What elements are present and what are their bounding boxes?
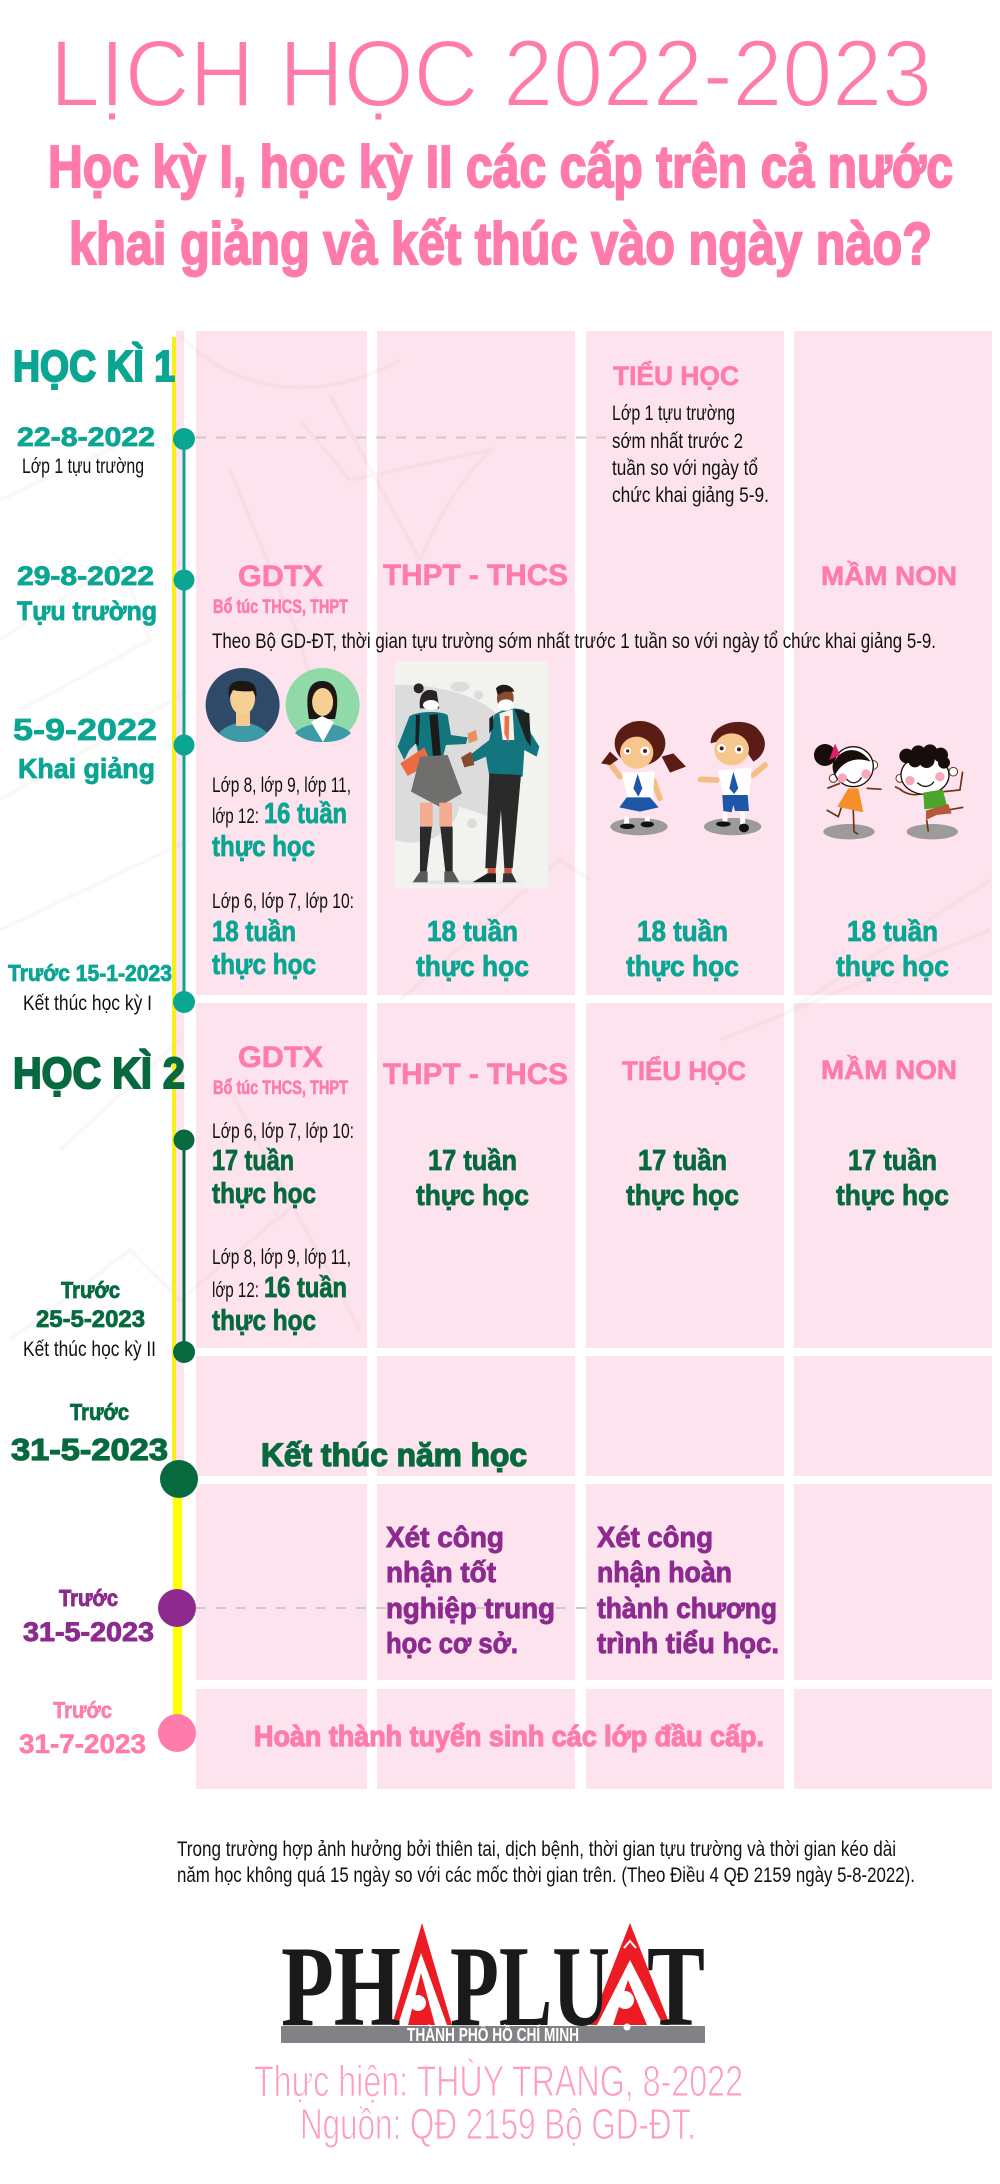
date: before 25-5-2023: [23, 1277, 156, 1361]
date: end of school year: [11, 1399, 168, 1467]
semester 1 study duration: GDTX: thực học: [212, 831, 315, 863]
note: Kết thúc học kỳ I: Kết thúc học kỳ I: [23, 992, 152, 1015]
semester 1 study duration: GDTX: Lớp 8, lớp 9, lớp 11,: [212, 774, 351, 797]
semester 1 study duration: other levels: 18 tuần: [427, 916, 518, 948]
milestone: lower secondary graduation: học cơ sở.: [386, 1628, 518, 1660]
primary school block, semester 1: tuần so với ngày tổ: [612, 457, 758, 480]
title: LỊCH HỌC 2022-2023: [50, 21, 932, 127]
date: enrolment deadline: [19, 1697, 146, 1759]
date: before 25-5-2023: Trước: [61, 1277, 120, 1303]
semester 2 column headings: [213, 1041, 957, 1099]
note: Lớp 1 tựu trường: Lớp 1 tựu trường: [22, 455, 144, 478]
logo: Pháp Luật TP.HCM: PH: [281, 1923, 401, 2050]
logo: Pháp Luật TP.HCM: THÀNH PHỐ HỒ CHÍ MINH: [407, 2024, 579, 2045]
subtitle: [48, 134, 953, 277]
date 5-9-2022: 5-9-2022: [13, 712, 157, 747]
semester 2 column headings: MẦM NON: [821, 1054, 957, 1085]
date 22-8-2022: 22-8-2022: [17, 422, 155, 452]
semester 2 study duration: other levels: thực học: [626, 1180, 739, 1212]
milestone: lower secondary graduation: Xét công: [386, 1522, 504, 1554]
date Trước 15-1-2023: Trước 15-1-2023: [8, 960, 172, 986]
semester 1 column headings: [213, 559, 957, 618]
semester 2 column headings: THPT - THCS: [383, 1058, 568, 1091]
semester 1 study duration: other levels: [416, 916, 949, 983]
semester 2 study duration: GDTX: Lớp 6, lớp 7, lớp 10:: [212, 1120, 354, 1143]
semester 2 column headings: Bổ túc THCS, THPT: [213, 1078, 348, 1099]
logo: Pháp Luật TP.HCM: T: [647, 1923, 705, 2050]
semester 2 study duration: other levels: thực học: [416, 1180, 529, 1212]
date: enrolment deadline: 31-7-2023: [19, 1729, 146, 1759]
semester 2 study duration: other levels: 17 tuần: [638, 1145, 727, 1177]
semester 2 study duration: other levels: 17 tuần: [848, 1145, 937, 1177]
semester 1 study duration: GDTX: Lớp 6, lớp 7, lớp 10:: [212, 890, 354, 913]
panel grid: [176, 331, 992, 1789]
semester 2 study duration: GDTX: 17 tuần: [212, 1145, 294, 1177]
heading: Học kì 1: HỌC KÌ 1: [13, 341, 175, 391]
primary school block, semester 1: chức khai giảng 5-9.: [612, 484, 769, 507]
semester 2 column headings: TIỂU HỌC: [622, 1055, 746, 1086]
illustration: primary pupils: [601, 721, 765, 835]
semester 1 study duration: other levels: thực học: [836, 951, 949, 983]
label Khai giảng: Khai giảng: [18, 753, 155, 784]
footnote: [177, 1838, 915, 1887]
label Tựu trường: Tựu trường: [17, 596, 157, 626]
date: enrolment deadline: Trước: [53, 1697, 112, 1723]
semester 2 column headings: GDTX: [238, 1041, 323, 1074]
date 29-8-2022: 29-8-2022: [17, 561, 154, 591]
semester 1 study duration: GDTX: [212, 774, 354, 981]
milestone: enrolment: Hoàn thành tuyển sinh các lớp đầu cấp.: [254, 1721, 764, 1753]
primary school block, semester 1: TIỂU HỌC: [613, 360, 739, 391]
credits: [254, 2057, 743, 2149]
semester 1 study duration: GDTX: 16 tuần: [264, 798, 347, 830]
semester 2 study duration: GDTX: Lớp 8, lớp 9, lớp 11,: [212, 1246, 351, 1269]
heading: Học kì 2: HỌC KÌ 2: [13, 1048, 185, 1098]
semester 1 study duration: other levels: 18 tuần: [847, 916, 938, 948]
milestone: primary completion: trình tiểu học.: [597, 1628, 779, 1660]
dashed connector: graduation date: [196, 1607, 590, 1609]
semester 2 study duration: other levels: thực học: [836, 1180, 949, 1212]
primary school block, semester 1: [612, 360, 769, 507]
logo: Pháp Luật TP.HCM: [281, 1923, 705, 2050]
milestone: primary completion: [597, 1522, 779, 1660]
semester 1 study duration: GDTX: lớp 12:: [212, 805, 259, 828]
milestone: primary completion: Xét công: [597, 1522, 713, 1554]
semester 1 study duration: GDTX: thực học: [212, 949, 316, 981]
semester 2 study duration: other levels: 17 tuần: [428, 1145, 517, 1177]
primary school block, semester 1: Lớp 1 tựu trường: [612, 402, 735, 425]
semester 2 study duration: GDTX: thực học: [212, 1178, 316, 1210]
credits: Nguồn: QĐ 2159 Bộ GD-ĐT.: [300, 2100, 696, 2149]
logo: Pháp Luật TP.HCM: PLU: [450, 1923, 610, 2050]
timeline axis: [158, 337, 198, 1752]
date: graduation review: Trước: [59, 1585, 118, 1611]
semester 1 timeline labels: [8, 341, 175, 986]
milestone: primary completion: thành chương: [597, 1593, 777, 1625]
date: before 25-5-2023: Kết thúc học kỳ II: [23, 1338, 156, 1361]
semester 2 study duration: GDTX: thực học: [212, 1305, 316, 1337]
illustration: kindergarten children: [814, 743, 963, 839]
date: graduation review: 31-5-2023: [23, 1617, 154, 1647]
semester 1 column headings: Bổ túc THCS, THPT: [213, 597, 348, 618]
milestone: lower secondary graduation: [386, 1522, 555, 1660]
dashed connector: first-grade date: [196, 436, 606, 438]
semester 1 column headings: THPT - THCS: [383, 559, 568, 592]
semester 1 column headings: GDTX: [238, 560, 323, 593]
illustration: secondary students in masks: [395, 661, 548, 888]
icon: male and female adult learners: [206, 668, 360, 742]
date: graduation review: [23, 1585, 154, 1647]
semester 1 column headings: MẦM NON: [821, 560, 957, 591]
semester 2 study duration: GDTX: lớp 12:: [212, 1279, 259, 1302]
semester 1 study duration: GDTX: 18 tuần: [212, 916, 296, 948]
semester 2 study duration: GDTX: 16 tuần: [264, 1272, 347, 1304]
primary school block, semester 1: sớm nhất trước 2: [612, 430, 743, 453]
semester 2 study duration: other levels: [416, 1145, 949, 1212]
semester 2 study duration: GDTX: [212, 1120, 354, 1337]
date: end of school year: Trước: [70, 1399, 129, 1425]
semester 1 study duration: other levels: thực học: [416, 951, 529, 983]
date: end of school year: 31-5-2023: [11, 1432, 168, 1467]
milestone: Kết thúc năm học: Kết thúc năm học: [261, 1437, 527, 1473]
milestone: lower secondary graduation: nhận tốt: [386, 1557, 496, 1589]
semester 1 study duration: other levels: thực học: [626, 951, 739, 983]
milestone: lower secondary graduation: nghiệp trung: [386, 1593, 555, 1625]
credits: Thực hiện: THÙY TRANG, 8-2022: [254, 2057, 743, 2106]
date: before 25-5-2023: 25-5-2023: [36, 1306, 145, 1333]
milestone: primary completion: nhận hoàn: [597, 1557, 732, 1589]
semester 1 study duration: other levels: 18 tuần: [637, 916, 728, 948]
